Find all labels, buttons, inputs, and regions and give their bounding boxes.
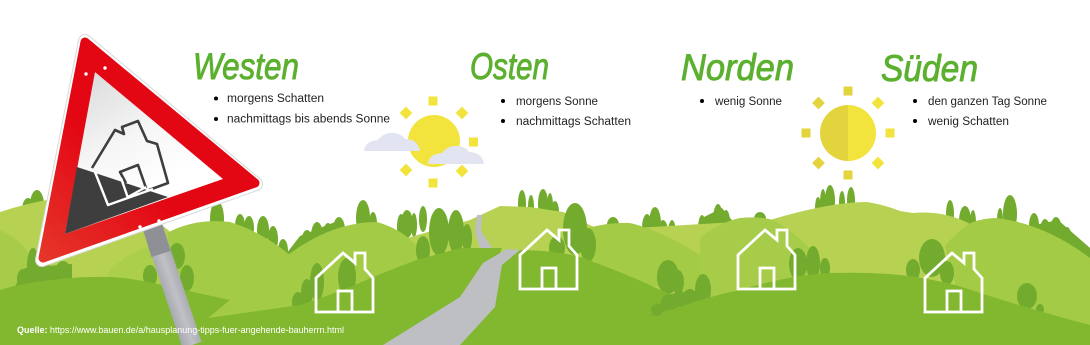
cloud right [428,146,484,164]
list: Osten [501,96,631,128]
list: Westen: morgens Schatten [227,93,324,105]
white field [65,72,223,234]
list: Westen [214,93,390,126]
source line: Quelle: https://www.bauen.de/a/hausplanung-tipps-fuer-angehende-bauherrn.html [17,325,344,336]
far hill [400,202,972,300]
left hills [0,198,180,300]
heading: Osten: Osten [470,46,549,87]
list: Norden: wenig Sonne [714,96,782,108]
trees behind the hills [22,185,1090,269]
heading: Norden: Norden [681,47,794,88]
warning sign: steep slope [42,41,256,260]
sign post [152,225,192,345]
icon: house north [738,230,795,289]
icon: house south [925,253,982,312]
trees on the front hill [650,290,680,316]
list: Westen: nachmittags bis abends Sonne [227,114,390,126]
landscape: green hills with trees and road [0,185,1090,345]
base ground [0,240,1090,345]
road [383,249,520,345]
slope [65,167,168,234]
list: Süden: wenig Schatten [927,116,1009,128]
list: Süden [913,96,1047,128]
icon: sun with clouds [364,96,484,188]
rivets [84,66,161,229]
icon: full sun [802,86,894,180]
sign border [42,41,256,260]
icon: house east [520,230,577,289]
heading: Süden: Süden [881,48,978,89]
icon: house west [316,253,373,312]
list: Osten: morgens Sonne [516,96,598,108]
heading: Westen: Westen [193,46,299,87]
cloud left [364,133,420,151]
far road [475,215,492,248]
mid hills [588,223,710,300]
red frame [43,42,255,258]
list: Osten: nachmittags Schatten [516,116,631,128]
tilted house outline [92,121,168,205]
list: Süden: den ganzen Tag Sonne [928,96,1047,108]
mid trees in front of far hills [13,203,1044,314]
front hills [0,248,502,345]
